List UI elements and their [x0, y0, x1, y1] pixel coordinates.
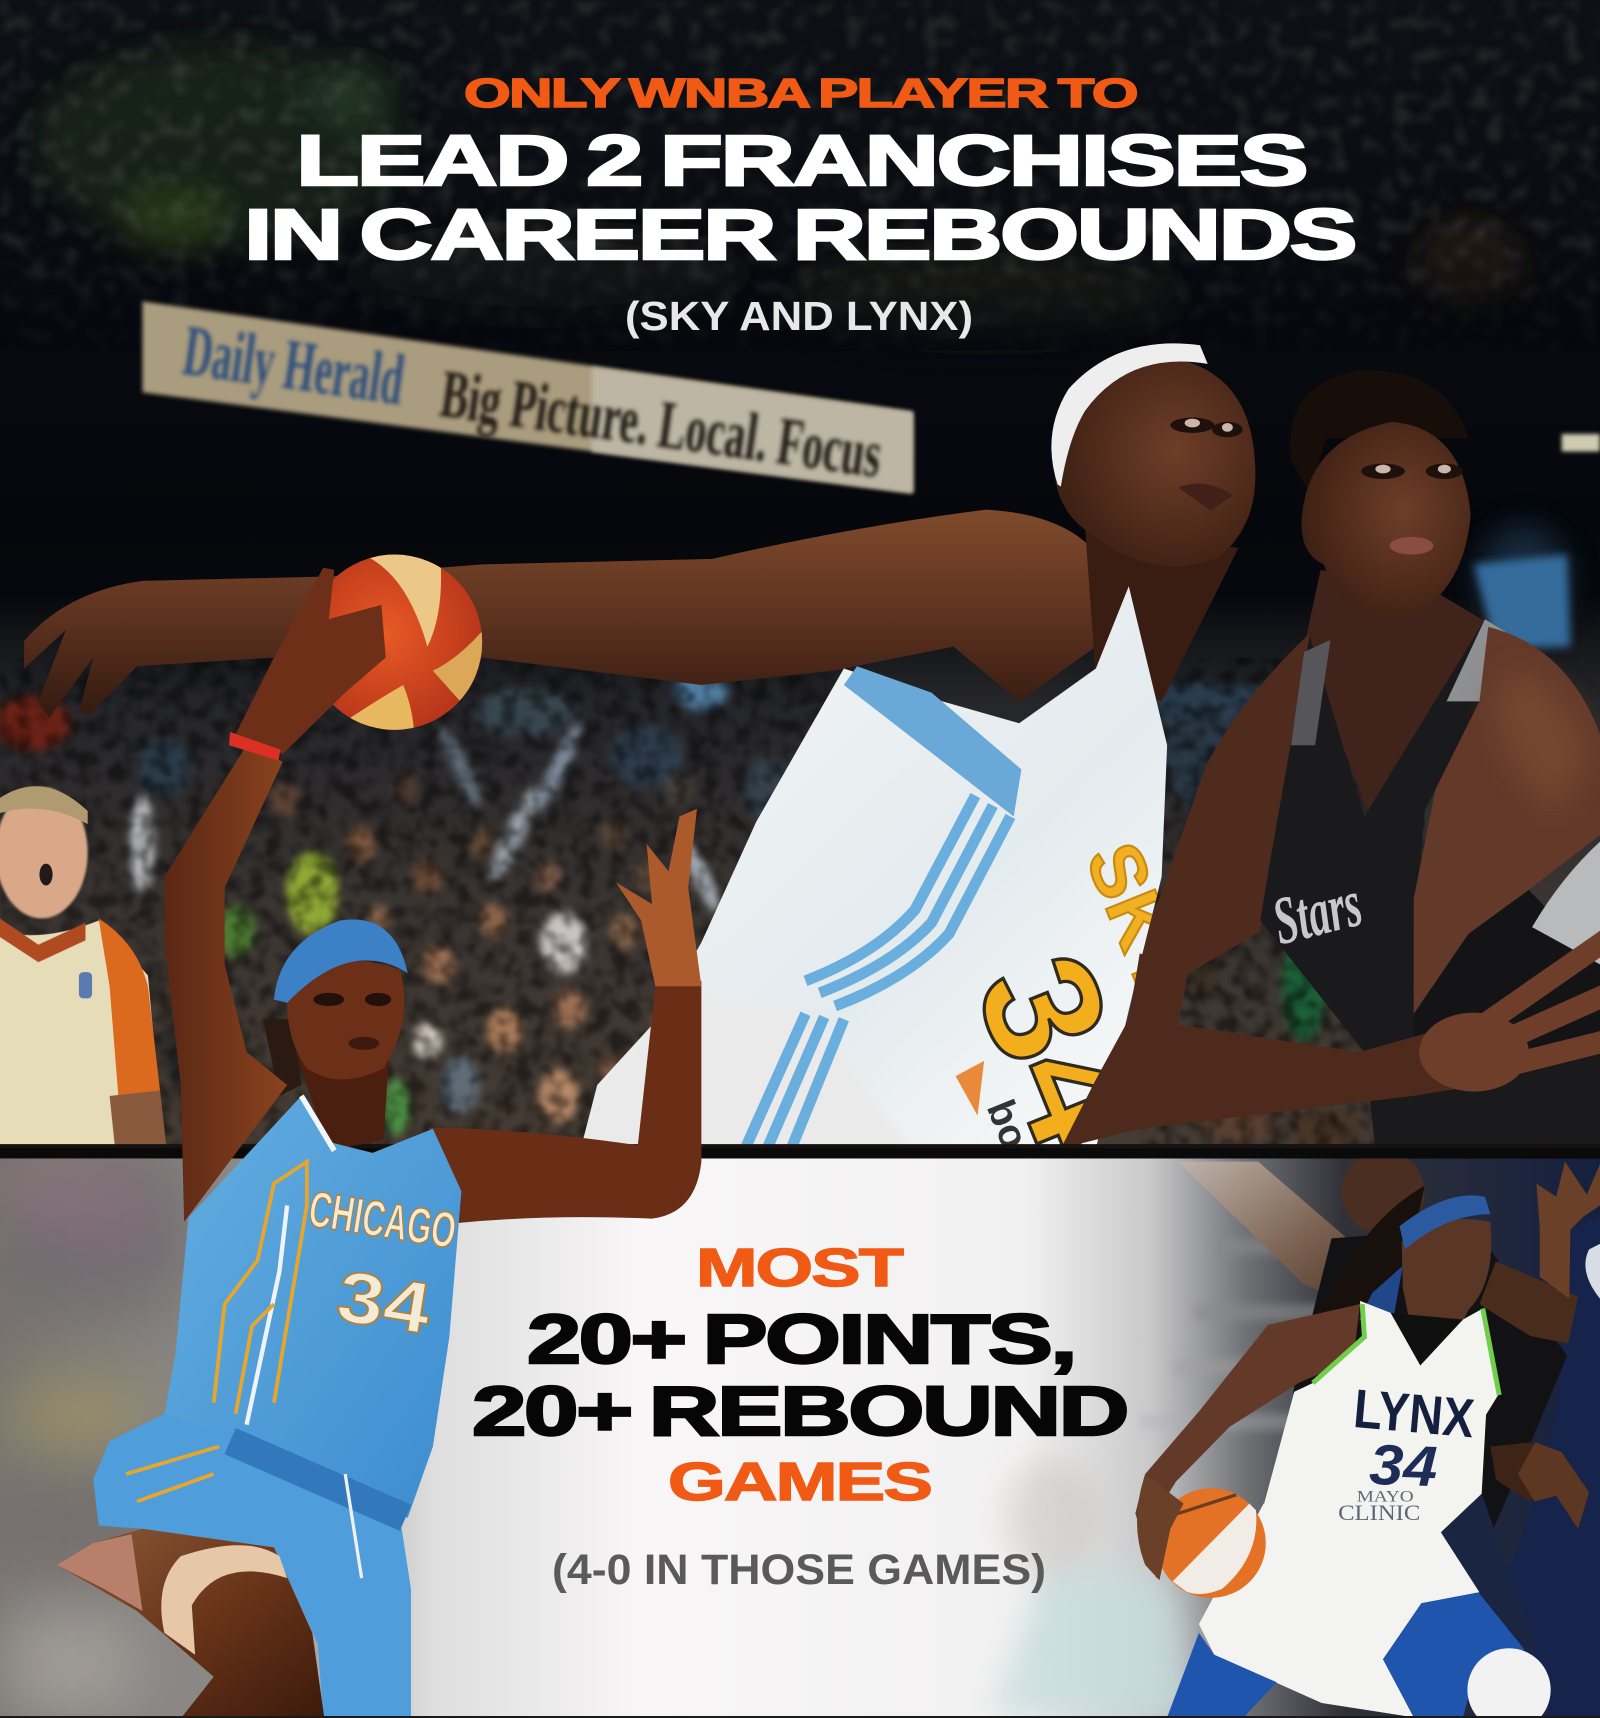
stat line 2: 20+ REBOUND — [472, 1372, 1127, 1450]
chicago wordmark: CHICAGO — [305, 1180, 460, 1259]
scoreboard sign — [1474, 555, 1570, 649]
sky blue stripes — [745, 796, 1010, 1149]
raised arm — [164, 745, 287, 1222]
sponsor banner — [142, 301, 913, 493]
blue headband — [1399, 1195, 1490, 1249]
hand on ball — [236, 542, 488, 754]
jersey side dark — [1414, 890, 1600, 1052]
raised leg — [57, 1529, 324, 1718]
note: record in those games: (4-0 IN THOSE GAMES) — [552, 1546, 1046, 1594]
player: black Stars jersey defender — [1140, 370, 1600, 1149]
yellow team letters: SKY — [1069, 832, 1207, 1010]
defender lower arm — [1490, 1442, 1556, 1501]
defender right arm — [1414, 627, 1600, 1014]
blurred background stands right — [1140, 1238, 1326, 1430]
headband — [274, 919, 408, 1003]
blue shorts — [93, 1414, 411, 1718]
face — [287, 961, 405, 1079]
defender shorts — [1440, 1494, 1536, 1655]
blurred spectator — [992, 1458, 1195, 1717]
sponsor text: bo — [978, 1094, 1037, 1155]
white jersey — [581, 586, 1167, 1149]
forearm and hand over jersey — [1061, 940, 1600, 1149]
subhead: games: GAMES — [668, 1452, 931, 1512]
blue leggings — [1383, 1592, 1524, 1717]
upper arena photo panel — [0, 0, 1600, 1172]
white shorts — [1199, 1504, 1479, 1717]
subhead: most: MOST — [696, 1238, 904, 1298]
player: white Sky jersey number 34 — [24, 343, 1600, 1172]
divider band — [0, 1148, 1600, 1158]
defender neck — [1304, 570, 1490, 816]
neck — [1085, 526, 1238, 701]
player: Chicago 34 leaping with ball — [57, 542, 701, 1718]
player: white Lynx jersey number 34 — [1135, 1162, 1600, 1718]
hand on ball — [1137, 1474, 1184, 1580]
head — [1402, 1219, 1491, 1342]
face — [1054, 356, 1255, 566]
blue jersey — [164, 1096, 461, 1518]
chicago number: 34 — [332, 1256, 436, 1350]
headband — [1051, 343, 1208, 487]
hair — [263, 1019, 301, 1096]
raised hand and arm — [1536, 1162, 1600, 1299]
knee tape — [161, 1545, 287, 1655]
blurred background left — [0, 1158, 186, 1718]
heading line 2: IN CAREER REBOUNDS — [244, 196, 1355, 275]
red basketball — [307, 542, 488, 740]
defender left arm — [1140, 633, 1310, 973]
white shorts shade — [584, 1027, 896, 1143]
jersey trim — [1446, 619, 1508, 702]
stars logo: Stars — [1265, 864, 1369, 959]
knee sleeve — [1467, 1648, 1551, 1718]
neck — [296, 1052, 389, 1151]
extended arm — [428, 981, 701, 1223]
note: Sky and Lynx: (SKY AND LYNX) — [625, 293, 973, 339]
sponsor banner: Daily Herald — [179, 310, 409, 420]
bottom edge line — [0, 1716, 1600, 1718]
sponsor second line: CLINIC — [1338, 1500, 1420, 1525]
sponsor banner: Big Picture. Local. Focus — [436, 355, 886, 492]
subhead: only WNBA player to: ONLY WNBA PLAYER TO — [464, 70, 1137, 116]
left arm — [1135, 1304, 1360, 1578]
Lynx ball — [1156, 1488, 1266, 1598]
red wristband — [229, 732, 281, 761]
defender hair — [1290, 370, 1469, 493]
sponsor: MAYO — [1357, 1488, 1414, 1505]
neckline — [1391, 1313, 1463, 1365]
reaching arm — [24, 510, 1107, 718]
side panel — [1532, 842, 1600, 964]
braids — [1315, 1186, 1425, 1326]
stat line 1: 20+ POINTS, — [527, 1300, 1075, 1378]
blue side panel — [844, 666, 1021, 816]
Lynx number: 34 — [1368, 1433, 1438, 1499]
Lynx jersey — [1264, 1301, 1498, 1533]
defender raised arm — [1178, 1162, 1364, 1310]
heading line 1: LEAD 2 FRANCHISES — [296, 122, 1306, 201]
stars jersey and shorts — [1260, 619, 1600, 1149]
lower photo panel — [0, 1151, 1600, 1718]
crowd behind players — [0, 592, 1600, 1151]
Lynx wordmark: LYNX — [1351, 1377, 1477, 1449]
navy arena board — [1501, 1216, 1600, 1718]
defender head — [1341, 1151, 1425, 1234]
upper stands crowd — [0, 0, 1600, 636]
orange sponsor mark — [956, 1061, 984, 1116]
defender behind Lynx player — [1178, 1151, 1578, 1655]
defender torso — [1293, 1227, 1567, 1556]
rink board light — [1562, 434, 1600, 452]
defender face — [1302, 422, 1471, 619]
lower hand — [1518, 1442, 1589, 1529]
yellow jersey number: 34 — [941, 930, 1181, 1172]
referee — [0, 786, 167, 1149]
